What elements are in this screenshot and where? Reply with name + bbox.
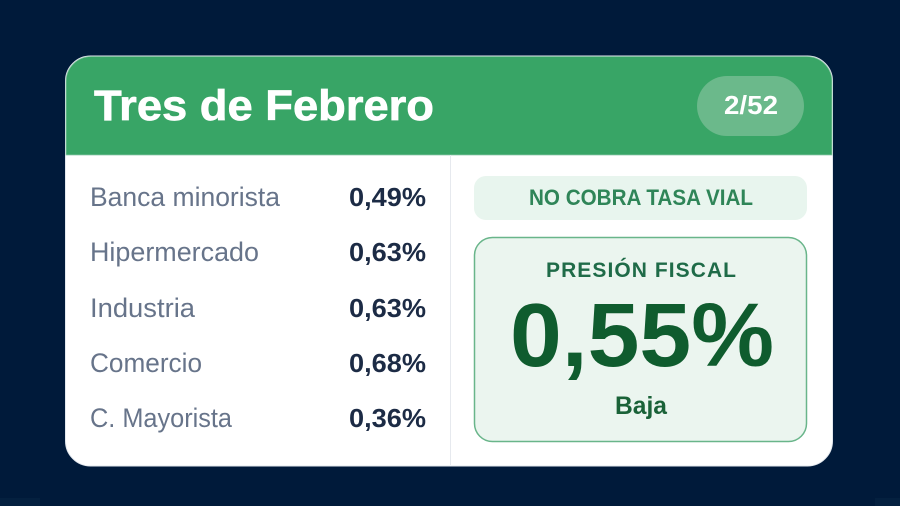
- row: Industria: 0,63%: [349, 293, 426, 323]
- row: Banca minorista: Banca minorista: [90, 182, 281, 212]
- title: Tres de Febrero: [94, 82, 434, 130]
- rank badge: 2/52: [724, 90, 778, 120]
- row: Comercio: [90, 348, 426, 378]
- panel: presión fiscal: [474, 238, 806, 442]
- tasa vial tag: [474, 176, 807, 220]
- row: Banca minorista: [90, 182, 426, 212]
- row: Hipermercado: 0,63%: [349, 237, 426, 267]
- row: C. Mayorista: [90, 403, 426, 433]
- row: Comercio: 0,68%: [349, 348, 426, 378]
- row: C. Mayorista: C. Mayorista: [90, 403, 233, 433]
- row: C. Mayorista: 0,36%: [349, 403, 426, 433]
- card body: [66, 56, 832, 466]
- rank badge: [697, 76, 804, 136]
- row: Industria: [90, 293, 426, 323]
- card header: [66, 56, 832, 155]
- row: Industria: Industria: [90, 293, 196, 323]
- row: Hipermercado: [90, 237, 426, 267]
- tasa vial tag: NO COBRA TASA VIAL: [529, 185, 753, 210]
- card: [66, 56, 832, 466]
- row: Hipermercado: Hipermercado: [90, 237, 259, 267]
- row: Banca minorista: 0,49%: [349, 182, 426, 212]
- panel heading: PRESIÓN FISCAL: [546, 258, 736, 282]
- main value: 0,55%: [510, 286, 774, 386]
- rating: Baja: [615, 392, 668, 420]
- rates list: [90, 182, 426, 433]
- row: Comercio: Comercio: [90, 348, 202, 378]
